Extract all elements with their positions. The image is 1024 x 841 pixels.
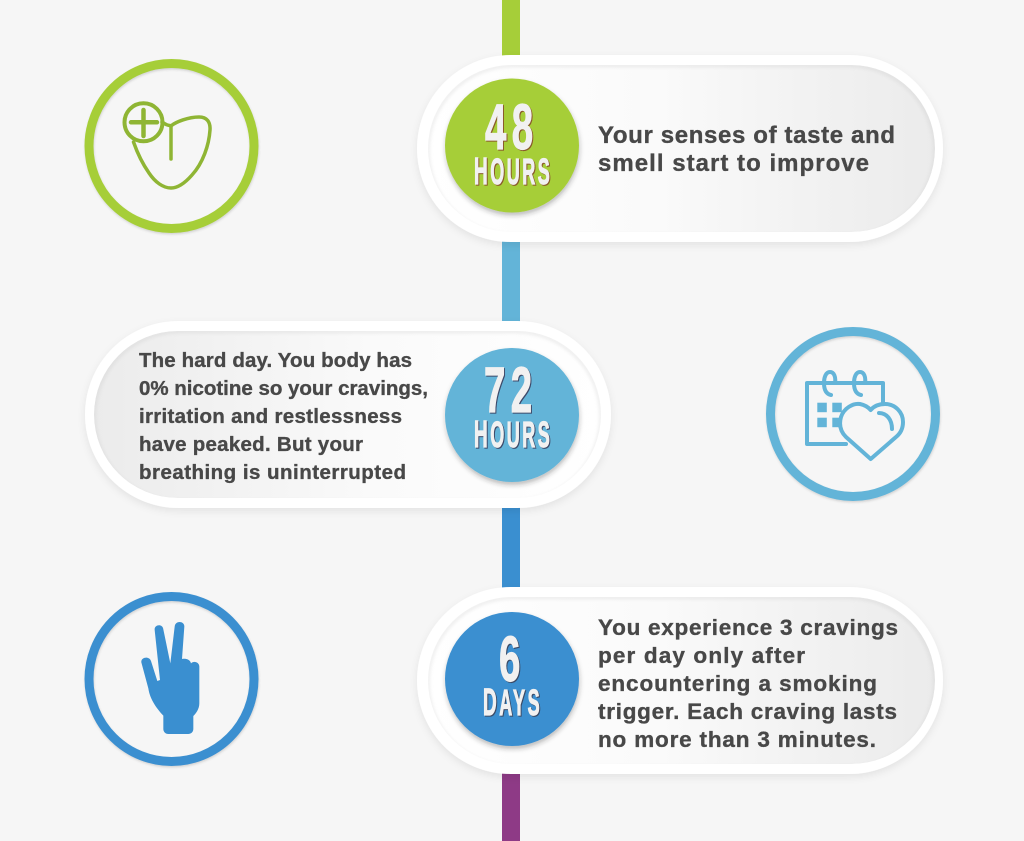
text: cravings: You experience 3 cravings (598, 615, 898, 640)
badge: 72 hours: HOURS (474, 414, 552, 456)
text: cravings: encountering a smoking (598, 671, 877, 696)
timeline bar: green (502, 0, 520, 56)
pill inner (94, 331, 601, 502)
timeline bar: purple (502, 772, 520, 841)
heart (840, 404, 903, 459)
text: cravings: per day only after (598, 643, 805, 668)
text: cravings (598, 615, 898, 752)
badge: 48 hours: HOURS (474, 151, 552, 193)
text: senses: smell start to improve (598, 150, 869, 177)
binder rings (824, 372, 835, 395)
panel: 6 days (417, 587, 943, 774)
text: the hard day: breathing is uninterrupted (139, 461, 406, 484)
badge: 72 hours: 72 (484, 355, 538, 427)
pill outer (417, 587, 943, 774)
badge: 72 hours (445, 348, 579, 482)
icon: three-finger hand (89, 596, 254, 762)
pill outer (417, 55, 943, 242)
calendar (807, 383, 883, 444)
badge: 6 days (445, 612, 579, 746)
tongue outline (134, 117, 210, 188)
text: cravings: trigger. Each craving lasts (598, 699, 897, 724)
pill outer (85, 321, 611, 508)
timeline bar: light blue (502, 240, 520, 322)
panel: 48 hours (417, 55, 943, 242)
pill inner (428, 65, 935, 236)
text: senses: Your senses of taste and (598, 122, 895, 149)
text: senses (598, 122, 895, 177)
badge: 48 hours: 48 (485, 92, 539, 164)
hand (141, 622, 199, 734)
badge: 6 days: 6 (499, 624, 526, 696)
ring (89, 596, 254, 762)
text: the hard day: 0% nicotine so your cravings, (139, 377, 428, 400)
text: cravings: no more than 3 minutes. (598, 727, 876, 752)
text: the hard day: have peaked. But your (139, 433, 363, 456)
plus circle (124, 103, 162, 141)
ring (89, 64, 254, 228)
timeline bar: blue (502, 506, 520, 588)
pill inner (428, 597, 935, 768)
badge: 48 hours (445, 78, 579, 212)
text: the hard day (139, 349, 428, 484)
icon: tongue with plus (89, 64, 254, 228)
ring (770, 332, 936, 496)
text: the hard day: The hard day. You body has (139, 349, 412, 372)
text: the hard day: irritation and restlessness (139, 405, 402, 428)
date squares (817, 403, 842, 427)
icon: calendar with heart (770, 332, 936, 496)
panel: 72 hours (85, 321, 611, 508)
badge: 6 days: DAYS (483, 682, 542, 724)
